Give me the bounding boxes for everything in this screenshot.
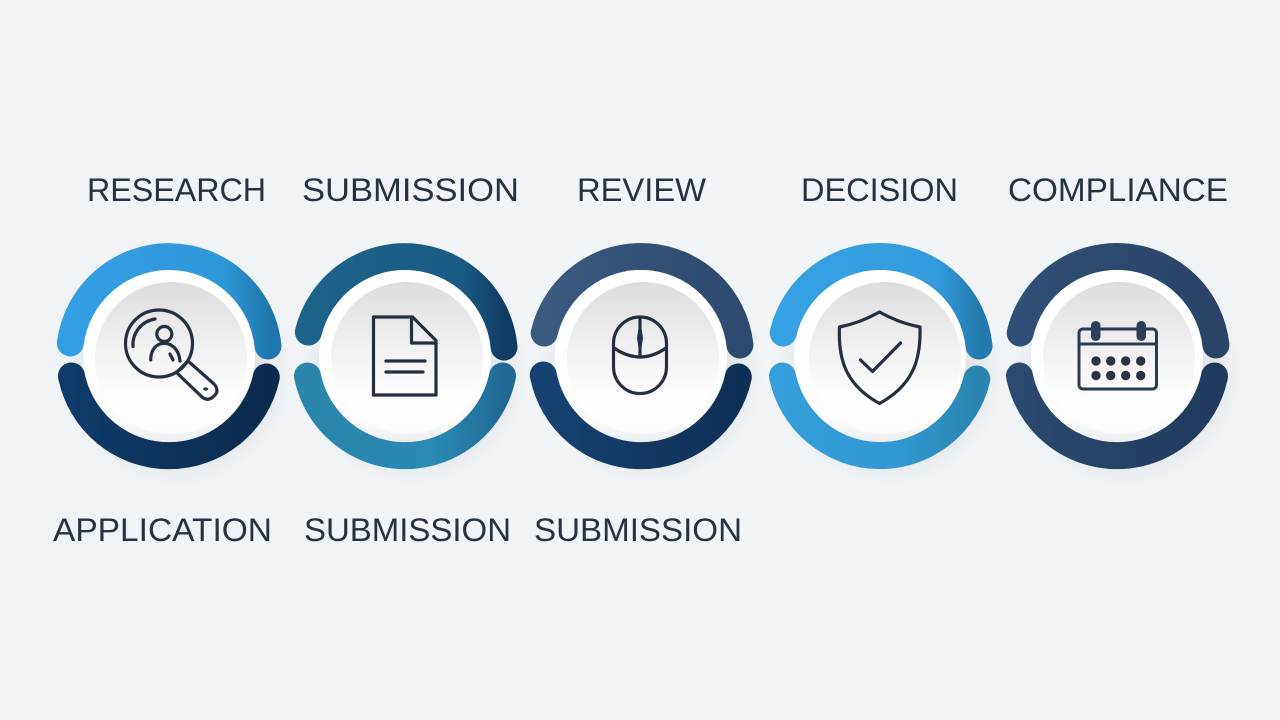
icon: document (374, 317, 436, 395)
label: REVIEW: REVIEW (577, 172, 706, 208)
step 2: submission (308, 257, 514, 472)
ring: step 5 bottom arc (1020, 376, 1214, 456)
label: RESEARCH: RESEARCH (87, 172, 266, 208)
ring: step 4 top arc (783, 257, 979, 346)
label: APPLICATION: APPLICATION (53, 512, 272, 548)
label: SUBMISSION top: SUBMISSION (302, 172, 519, 208)
ring: step 1 bottom arc (72, 376, 266, 456)
step 4: decision (782, 257, 989, 472)
label: DECISION: DECISION (801, 172, 958, 208)
ring: step 3 top arc (544, 256, 740, 345)
ring: step 3 bottom arc (543, 375, 738, 456)
icon: magnifier with person (126, 310, 217, 399)
ring: step 1 top arc (70, 257, 268, 346)
ring: step 4 bottom arc (782, 376, 977, 456)
ring: step 2 bottom arc (308, 376, 502, 456)
label: SUBMISSION bottom left: SUBMISSION (304, 512, 511, 548)
ring: step 5 top arc (1020, 256, 1216, 345)
icon: calendar (1079, 321, 1156, 389)
labels: top row (87, 172, 1228, 208)
ring: step 2 top arc (308, 257, 504, 347)
step 3: review (543, 256, 750, 472)
label: SUBMISSION bottom right: SUBMISSION (534, 512, 742, 548)
icon: shield with check (839, 312, 920, 404)
step 1: research (70, 257, 278, 472)
label: COMPLIANCE: COMPLIANCE (1008, 172, 1228, 208)
icon: computer mouse (614, 317, 666, 394)
step 5: compliance (1020, 256, 1226, 472)
labels: bottom row (53, 512, 742, 548)
